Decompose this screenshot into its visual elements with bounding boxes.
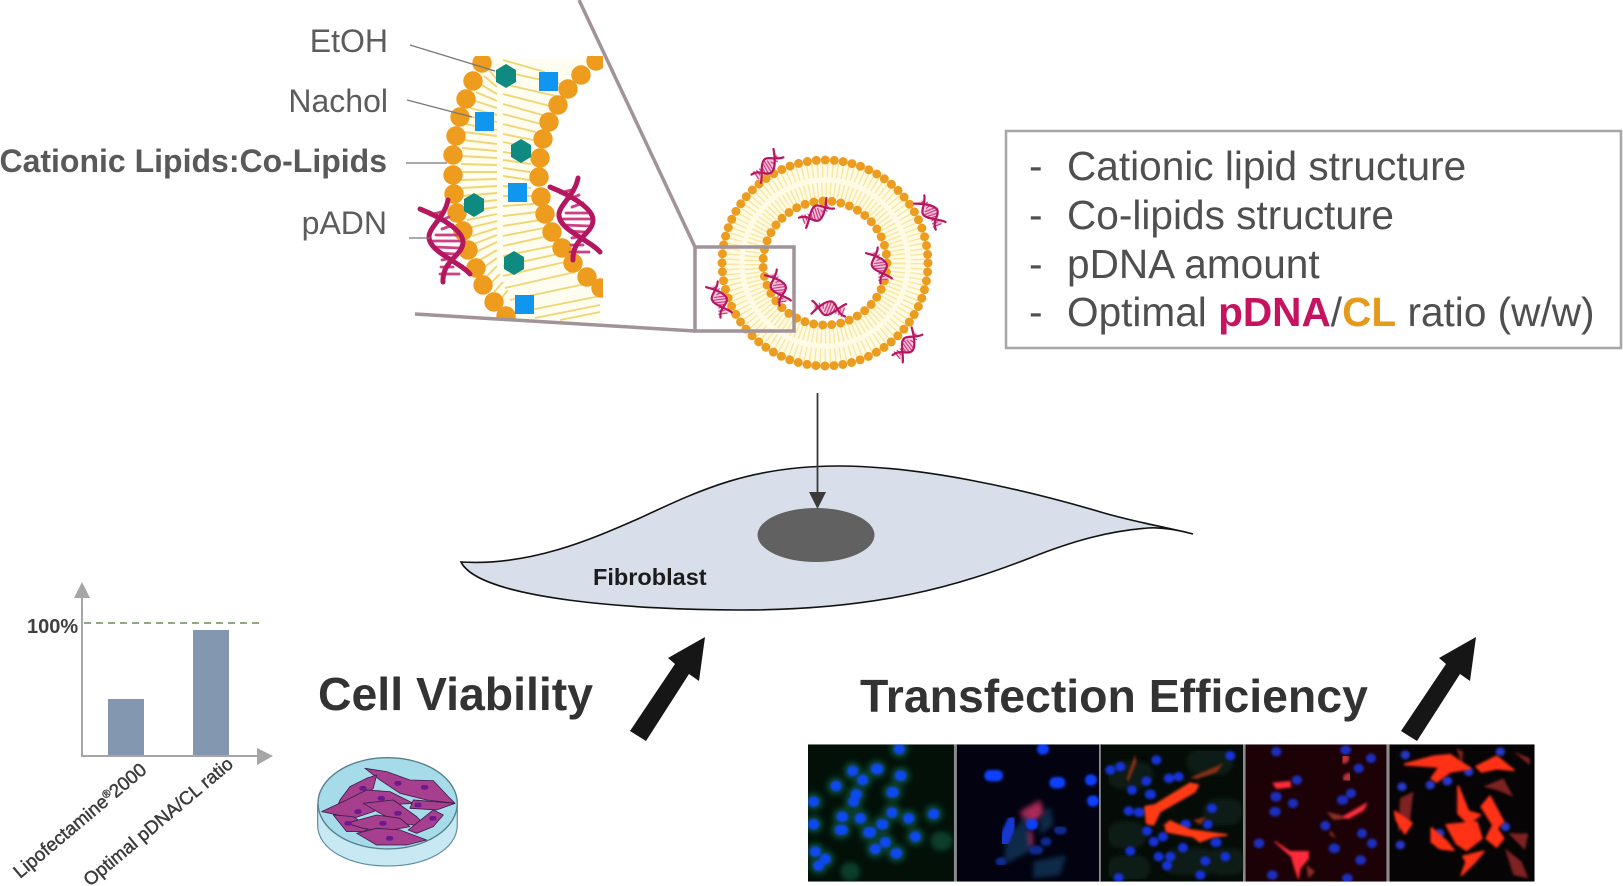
parameter: cationic lipid structure: Cationic lipid structure [1067, 143, 1466, 189]
label: Lipofectamine 2000: ® [100, 787, 114, 802]
Nachol squares [475, 72, 558, 314]
small pDNA strands [706, 147, 947, 365]
orange lipid heads, right leaflet [529, 56, 603, 298]
EtOH hexagons [464, 64, 531, 275]
parameter: co-lipids structure: Co-lipids structure [1067, 192, 1394, 238]
microscopy panel 5 [1389, 744, 1535, 882]
zoom box [695, 247, 794, 331]
parameter: pDNA amount: pDNA amount [1067, 241, 1320, 287]
microscopy panel 1 [808, 744, 954, 882]
arrow: transfection efficiency up [1401, 637, 1476, 741]
nucleus [758, 508, 874, 562]
orange lipid heads, left leaflet [443, 53, 516, 326]
cultured cells [322, 768, 455, 845]
microscopy panel 2 [957, 744, 1099, 882]
nuclei [347, 783, 434, 838]
formulation parameters box [1006, 131, 1621, 348]
label: Fibroblast: Fibroblast [593, 564, 707, 590]
axes [82, 598, 257, 756]
parameter: co-lipids structure: - [1029, 192, 1043, 238]
bar: Lipofectamine 2000 [108, 699, 144, 755]
label: optimal ratio: Optimal pDNA/CL ratio [79, 753, 237, 886]
parameter: cationic lipid structure: - [1029, 143, 1043, 189]
label: Cationic Lipids:Co-Lipids: Cationic Lipids:Co-Lipids [0, 143, 387, 179]
fibroblast cell [461, 466, 1193, 610]
microscopy panel 4 [1245, 744, 1387, 882]
lipid bilayer close-up [420, 51, 611, 326]
parameter: optimal ratio: Optimal [1067, 289, 1218, 335]
label: Lipofectamine 2000: Lipofectamine [9, 791, 112, 882]
microscopy panel 3 [1101, 744, 1243, 882]
microscopy panel row [808, 744, 1102, 882]
icon: petri dish with cells [318, 758, 457, 866]
bar: optimal ratio [193, 630, 229, 755]
leader lines [406, 45, 495, 238]
label: Nachol: Nachol [288, 83, 388, 119]
bar chart [9, 582, 273, 886]
parameter: pDNA amount: - [1029, 241, 1043, 287]
heading: Transfection Efficiency: Transfection Efficiency [860, 670, 1368, 722]
label: EtOH: EtOH [310, 23, 388, 59]
arrow: vesicle into nucleus [809, 393, 826, 509]
lipoplex vesicle [706, 147, 947, 366]
parameter: optimal ratio: - [1029, 289, 1043, 335]
label: Lipofectamine 2000: 2000 [105, 759, 150, 802]
large pDNA strands [420, 178, 600, 282]
label: pADN: pADN [302, 205, 387, 241]
label: 100%: 100% [27, 616, 78, 638]
heading: Cell Viability: Cell Viability [318, 668, 593, 720]
parameter: optimal ratio: pDNA/CL ratio (w/w) [1218, 289, 1595, 335]
zoom lines [415, 0, 695, 331]
arrow: cell viability up [630, 637, 705, 741]
